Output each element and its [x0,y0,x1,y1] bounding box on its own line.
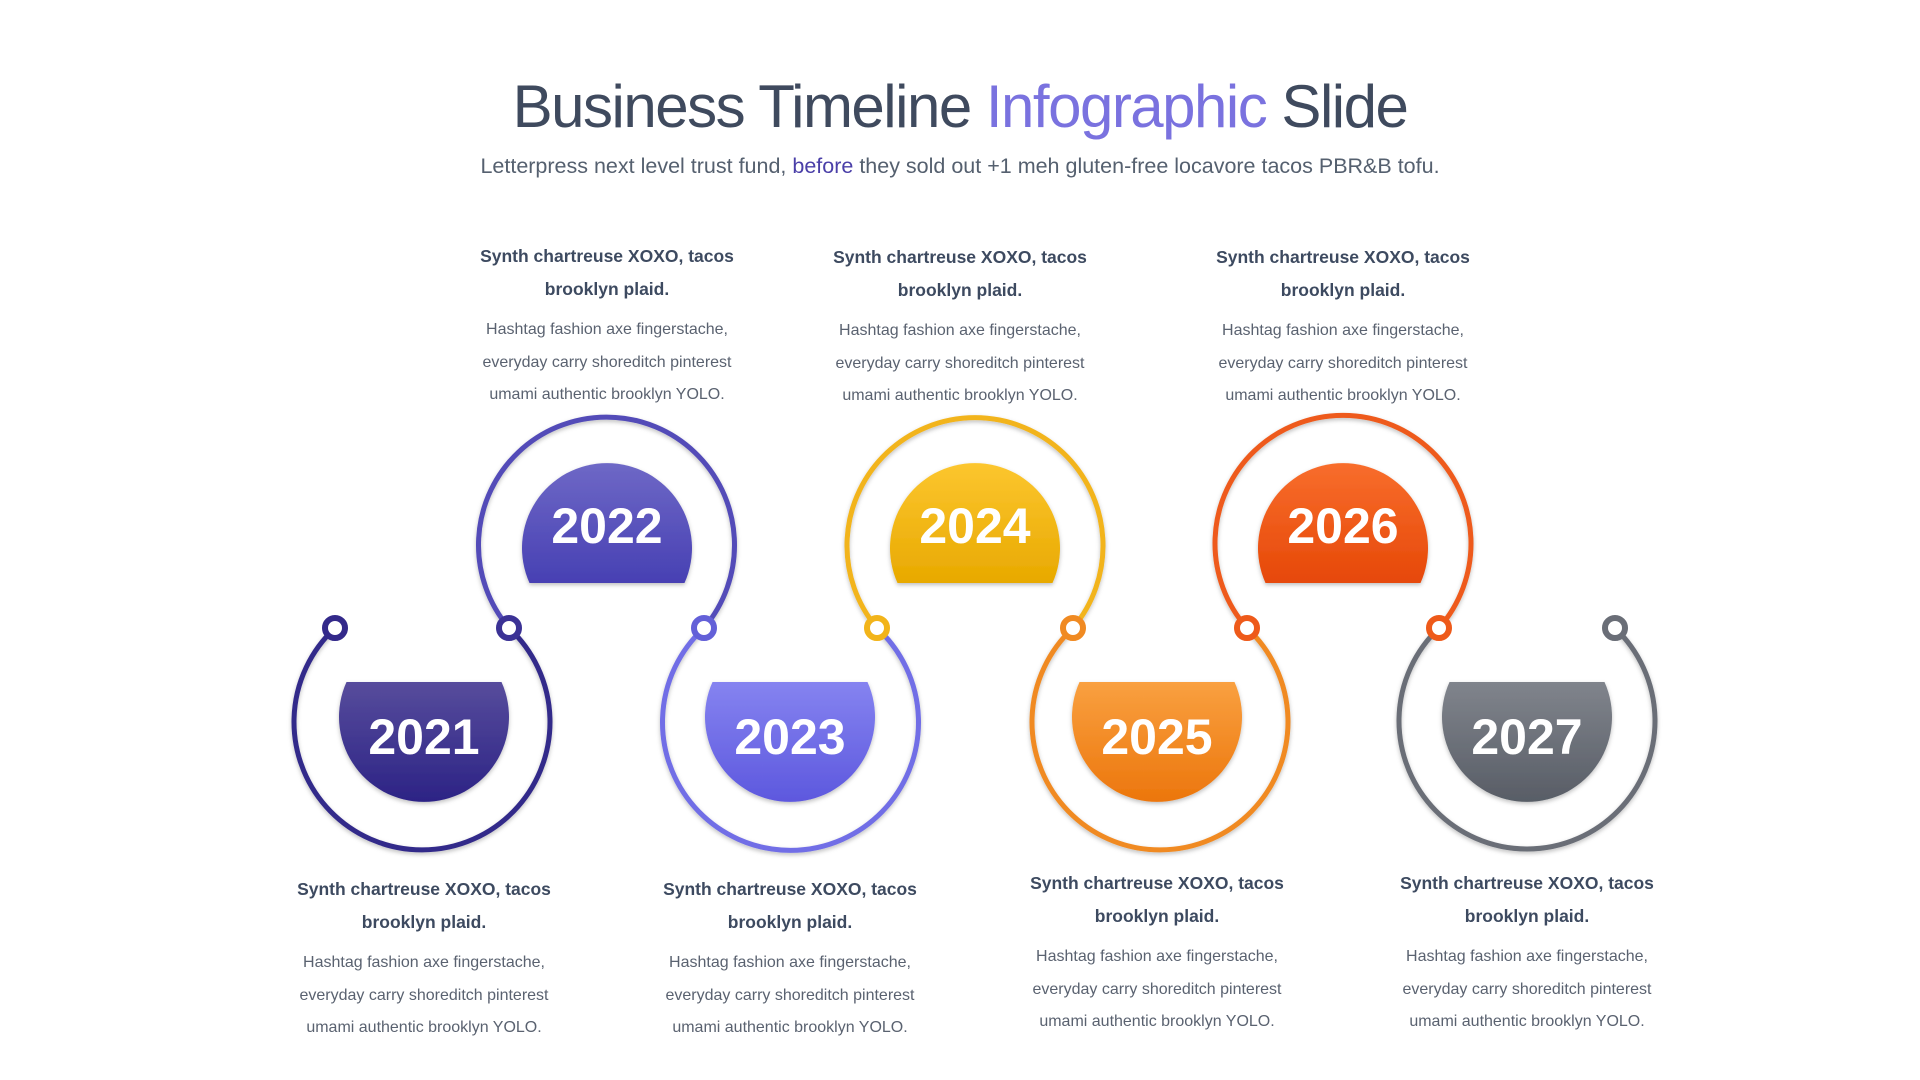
title: Business Timeline Infographic Slide [513,73,1407,140]
badge: 2024 [890,463,1060,583]
text block: 2025: brooklyn plaid. [1095,906,1219,926]
arc: 2022 [478,417,734,628]
text block: 2024: umami authentic brooklyn YOLO. [842,387,1078,404]
text block: 2027: Hashtag fashion axe fingerstache, [1406,948,1648,965]
text block: 2024: everyday carry shoreditch pinterest [836,354,1084,372]
badge: 2026 [1258,463,1428,583]
text block: 2027: Synth chartreuse XOXO, tacos [1400,873,1654,893]
text block: 2026: everyday carry shoreditch pinterest [1218,354,1468,372]
text block: 2022 [480,246,734,403]
text block: 2021 [297,879,551,1036]
text block: 2025: Hashtag fashion axe fingerstache, [1036,948,1278,965]
text block: 2027 [1400,873,1654,1030]
text block: 2025: umami authentic brooklyn YOLO. [1039,1013,1275,1030]
text block: 2023 [663,879,917,1036]
badge: 2022: 2022 [551,498,663,554]
badge: 2026: 2026 [1287,498,1399,554]
badge: 2025: 2025 [1101,709,1213,765]
text block: 2021: everyday carry shoreditch pinterest [300,986,548,1004]
text block: 2026: umami authentic brooklyn YOLO. [1225,387,1461,404]
text block: 2025: everyday carry shoreditch pinterest [1032,980,1282,998]
text block: 2024 [833,247,1087,404]
text block: 2023: brooklyn plaid. [728,912,852,932]
text block: 2026: Synth chartreuse XOXO, tacos [1216,247,1470,267]
badge: 2023: 2023 [734,709,846,765]
badge: 2025 [1072,682,1242,802]
text block: 2025 [1030,873,1284,1030]
text block: 2023: Synth chartreuse XOXO, tacos [663,879,917,899]
connector rings [325,618,1625,638]
text block: 2021: brooklyn plaid. [362,912,486,932]
badge: 2027: 2027 [1471,709,1583,765]
badge: 2022 [522,463,692,583]
text block: 2021: umami authentic brooklyn YOLO. [306,1019,542,1036]
text block: 2023: umami authentic brooklyn YOLO. [672,1019,908,1036]
text block: 2023: Hashtag fashion axe fingerstache, [669,954,911,971]
arc: 2023 [662,628,919,850]
text block: 2027: brooklyn plaid. [1465,906,1589,926]
text block: 2024: brooklyn plaid. [898,280,1022,300]
badge: 2023 [705,682,875,802]
text block: 2021: Hashtag fashion axe fingerstache, [303,954,545,971]
arc: 2025 [1032,628,1288,850]
text block: 2026: Hashtag fashion axe fingerstache, [1222,322,1464,339]
text block: 2027: everyday carry shoreditch pinterest [1402,980,1652,998]
subtitle: Letterpress next level trust fund, before they sold out +1 meh gluten-free locavore tacos PBR&B tofu. [480,154,1440,178]
text block: 2026 [1216,247,1470,404]
text block: 2024: Hashtag fashion axe fingerstache, [839,322,1081,339]
badge: 2021: 2021 [368,709,480,765]
text block: 2022: brooklyn plaid. [545,279,669,299]
text block: 2025: Synth chartreuse XOXO, tacos [1030,873,1284,893]
text block: 2027: umami authentic brooklyn YOLO. [1409,1013,1645,1030]
text block: 2022: Synth chartreuse XOXO, tacos [480,246,734,266]
text block: 2024: Synth chartreuse XOXO, tacos [833,247,1087,267]
text block: 2023: everyday carry shoreditch pinterest [666,986,914,1004]
text block: 2021: Synth chartreuse XOXO, tacos [297,879,551,899]
text block: 2022: Hashtag fashion axe fingerstache, [486,321,728,338]
badge: 2027 [1442,682,1612,802]
arc: 2027 [1399,628,1655,849]
text block: 2022: umami authentic brooklyn YOLO. [489,386,725,403]
arc: 2021 [294,628,550,850]
text block: 2026: brooklyn plaid. [1281,280,1405,300]
arc: 2026 [1215,415,1471,628]
badge: 2021 [339,682,509,802]
text block: 2022: everyday carry shoreditch pinterest [482,354,732,370]
arc: 2024 [847,418,1103,628]
badge: 2024: 2024 [919,498,1031,554]
